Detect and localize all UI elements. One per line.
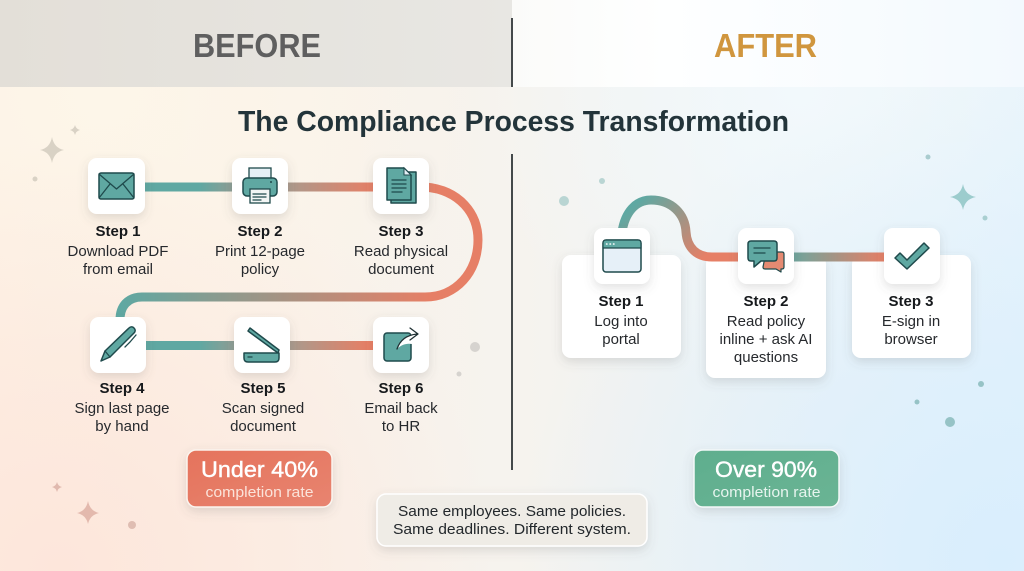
after step 2: inline + ask AI bbox=[720, 331, 812, 348]
icon: printer bbox=[232, 158, 288, 214]
after process connectors bbox=[622, 200, 888, 257]
before step 6 bbox=[364, 317, 438, 435]
before step 6: Step 6 bbox=[378, 380, 424, 397]
before step 4 bbox=[74, 317, 170, 435]
stat: over 90% bbox=[694, 450, 839, 507]
stat: over 90%: completion rate bbox=[712, 484, 820, 501]
before step 2: Print 12-page bbox=[215, 243, 305, 260]
before step 4: Sign last page bbox=[74, 400, 170, 417]
icon: envelope bbox=[88, 158, 145, 214]
before step 3 bbox=[354, 158, 448, 278]
before step 3: document bbox=[368, 261, 435, 278]
before step 2: Step 2 bbox=[237, 223, 283, 240]
after step 2: Step 2 bbox=[743, 293, 789, 310]
before step 1 bbox=[68, 158, 168, 278]
before step 5: document bbox=[230, 418, 297, 435]
after step 2: questions bbox=[734, 349, 798, 366]
icon: share bbox=[373, 317, 429, 373]
after step 3: Step 3 bbox=[888, 293, 934, 310]
before step 5 bbox=[222, 317, 304, 435]
icon: chat bubbles bbox=[738, 228, 794, 284]
before step 2: policy bbox=[241, 261, 280, 278]
after step 2 bbox=[720, 228, 812, 366]
header: after bbox=[512, 0, 1024, 87]
before step 4: Step 4 bbox=[99, 380, 145, 397]
before step 1: Step 1 bbox=[95, 223, 141, 240]
before step 1: from email bbox=[83, 261, 153, 278]
icon: document bbox=[373, 158, 429, 214]
callout bbox=[377, 494, 647, 546]
after step 1: Step 1 bbox=[598, 293, 644, 310]
after cards bbox=[562, 255, 971, 378]
stat: under 40%: completion rate bbox=[206, 484, 314, 501]
decorative sparkles and dots bbox=[32, 125, 988, 529]
after step 3 bbox=[882, 228, 940, 348]
icon: check mark bbox=[884, 228, 940, 284]
icon: scanner bbox=[234, 317, 290, 373]
header: before bbox=[0, 0, 512, 87]
before step 3: Read physical bbox=[354, 243, 448, 260]
before step 4: by hand bbox=[95, 418, 149, 435]
after step 3: E-sign in bbox=[882, 313, 940, 330]
before step 5: Scan signed bbox=[222, 400, 304, 417]
stat: under 40% bbox=[187, 450, 332, 507]
before step 2 bbox=[215, 158, 305, 278]
title: The Compliance Process Transformation bbox=[238, 106, 789, 138]
icon: pen bbox=[90, 317, 146, 373]
stat: over 90%: Over 90% bbox=[715, 457, 817, 482]
callout: Same deadlines. Different system. bbox=[393, 521, 631, 538]
after step 1: Log into bbox=[594, 313, 648, 330]
after step 2: Read policy bbox=[727, 313, 806, 330]
before step 3: Step 3 bbox=[378, 223, 424, 240]
after step 1: portal bbox=[602, 331, 640, 348]
header: after: AFTER bbox=[714, 27, 817, 64]
after step 3: browser bbox=[884, 331, 938, 348]
icon: browser window bbox=[594, 228, 650, 284]
stat: under 40%: Under 40% bbox=[201, 457, 318, 482]
before process connectors bbox=[120, 187, 478, 346]
header: before: BEFORE bbox=[193, 27, 321, 64]
after step 1 bbox=[594, 228, 650, 348]
before step 6: to HR bbox=[382, 418, 420, 435]
before step 6: Email back bbox=[364, 400, 438, 417]
before step 5: Step 5 bbox=[240, 380, 286, 397]
before step 1: Download PDF bbox=[68, 243, 168, 260]
callout: Same employees. Same policies. bbox=[398, 503, 626, 520]
